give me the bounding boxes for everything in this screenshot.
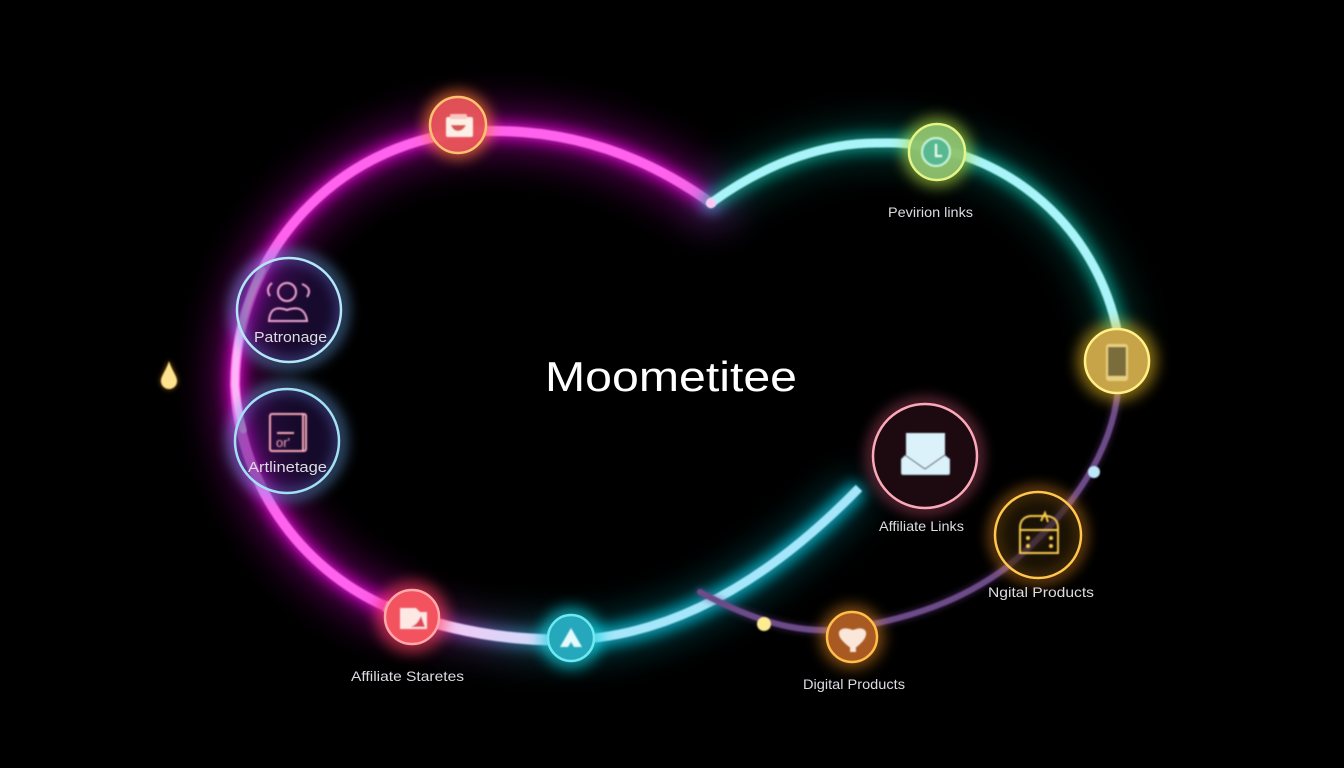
label: Affiliate Staretes: Affiliate Staretes: [351, 668, 464, 684]
node: Artlinetage: [233, 387, 341, 495]
icon: book: or': [276, 435, 290, 450]
node: cyan tent: [540, 607, 602, 669]
icon: clock: [922, 138, 950, 166]
icon: person: [268, 283, 309, 321]
node: Patronage: [235, 256, 343, 364]
icon: folder: [400, 608, 427, 629]
connector dot: yellow: [757, 617, 771, 631]
icon: briefcase: [446, 114, 473, 137]
label: Artlinetage: Artlinetage: [248, 459, 327, 476]
pink arc: [235, 131, 711, 606]
node: Affiliate Links: [872, 403, 978, 509]
node: briefcase: [424, 91, 492, 159]
label: Affiliate Links: Affiliate Links: [879, 518, 964, 534]
node: Ngital Products: [994, 491, 1082, 579]
node: green clock: [902, 117, 972, 187]
node: yellow phone: [1077, 321, 1157, 401]
connector dot: blue: [1088, 466, 1100, 478]
title: Moometitee: [545, 353, 797, 400]
cyan arc: [711, 143, 1118, 335]
purple arc: [700, 390, 1118, 630]
label: Ngital Products: Ngital Products: [988, 584, 1094, 600]
label: Patronage: Patronage: [254, 329, 327, 346]
bottom arc: [385, 488, 859, 640]
node: orange heart balloon: [820, 605, 884, 669]
icon: heart balloon: [839, 628, 866, 652]
label: Pevirion links: Pevirion links: [888, 205, 973, 220]
icon: phone: [1106, 344, 1128, 381]
icon: envelope: [901, 433, 950, 475]
node: red folder: [376, 581, 448, 653]
droplet marker: [161, 360, 177, 389]
icon: calendar: [1020, 513, 1058, 553]
label: Digital Products: Digital Products: [803, 676, 905, 692]
icon: tent: [560, 628, 582, 647]
arc junction point: [706, 198, 716, 208]
